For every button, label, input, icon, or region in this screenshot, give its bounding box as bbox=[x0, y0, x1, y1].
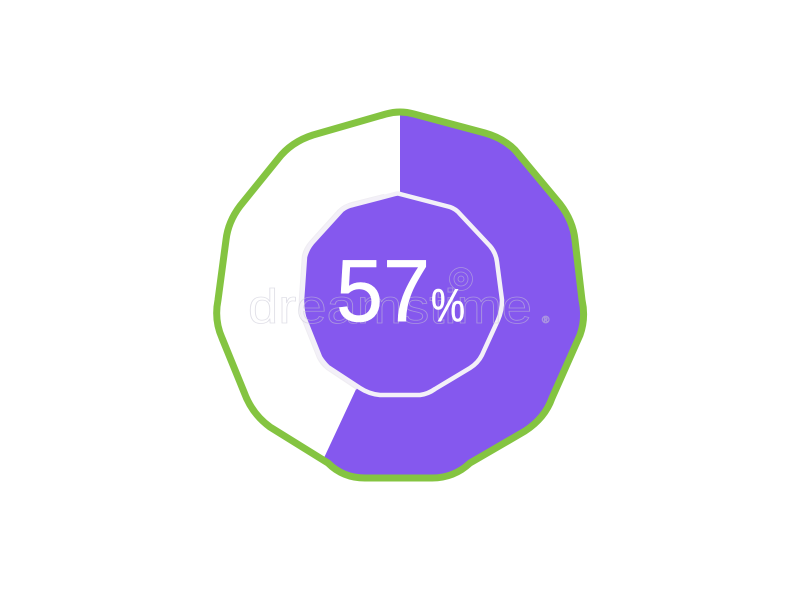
watermark: dreamstime outlined wordmark bbox=[248, 268, 550, 334]
watermark: dreamstime outlined wordmark: dreamstime bbox=[248, 281, 532, 334]
ring: outer green polygon outline bbox=[217, 112, 584, 478]
icon: watermark spiral bbox=[450, 268, 472, 290]
label: 57 value: 57 bbox=[336, 241, 430, 340]
wedge: 57 percent purple segment bbox=[324, 116, 580, 474]
label: percent sign: % bbox=[431, 279, 465, 331]
infographic: 57% polygon donut chart bbox=[213, 108, 588, 482]
icon: registered mark: ® bbox=[542, 315, 550, 326]
inner polygon: purple centre with light outline bbox=[302, 194, 502, 395]
inner ring left half: grey outline bbox=[302, 197, 385, 387]
